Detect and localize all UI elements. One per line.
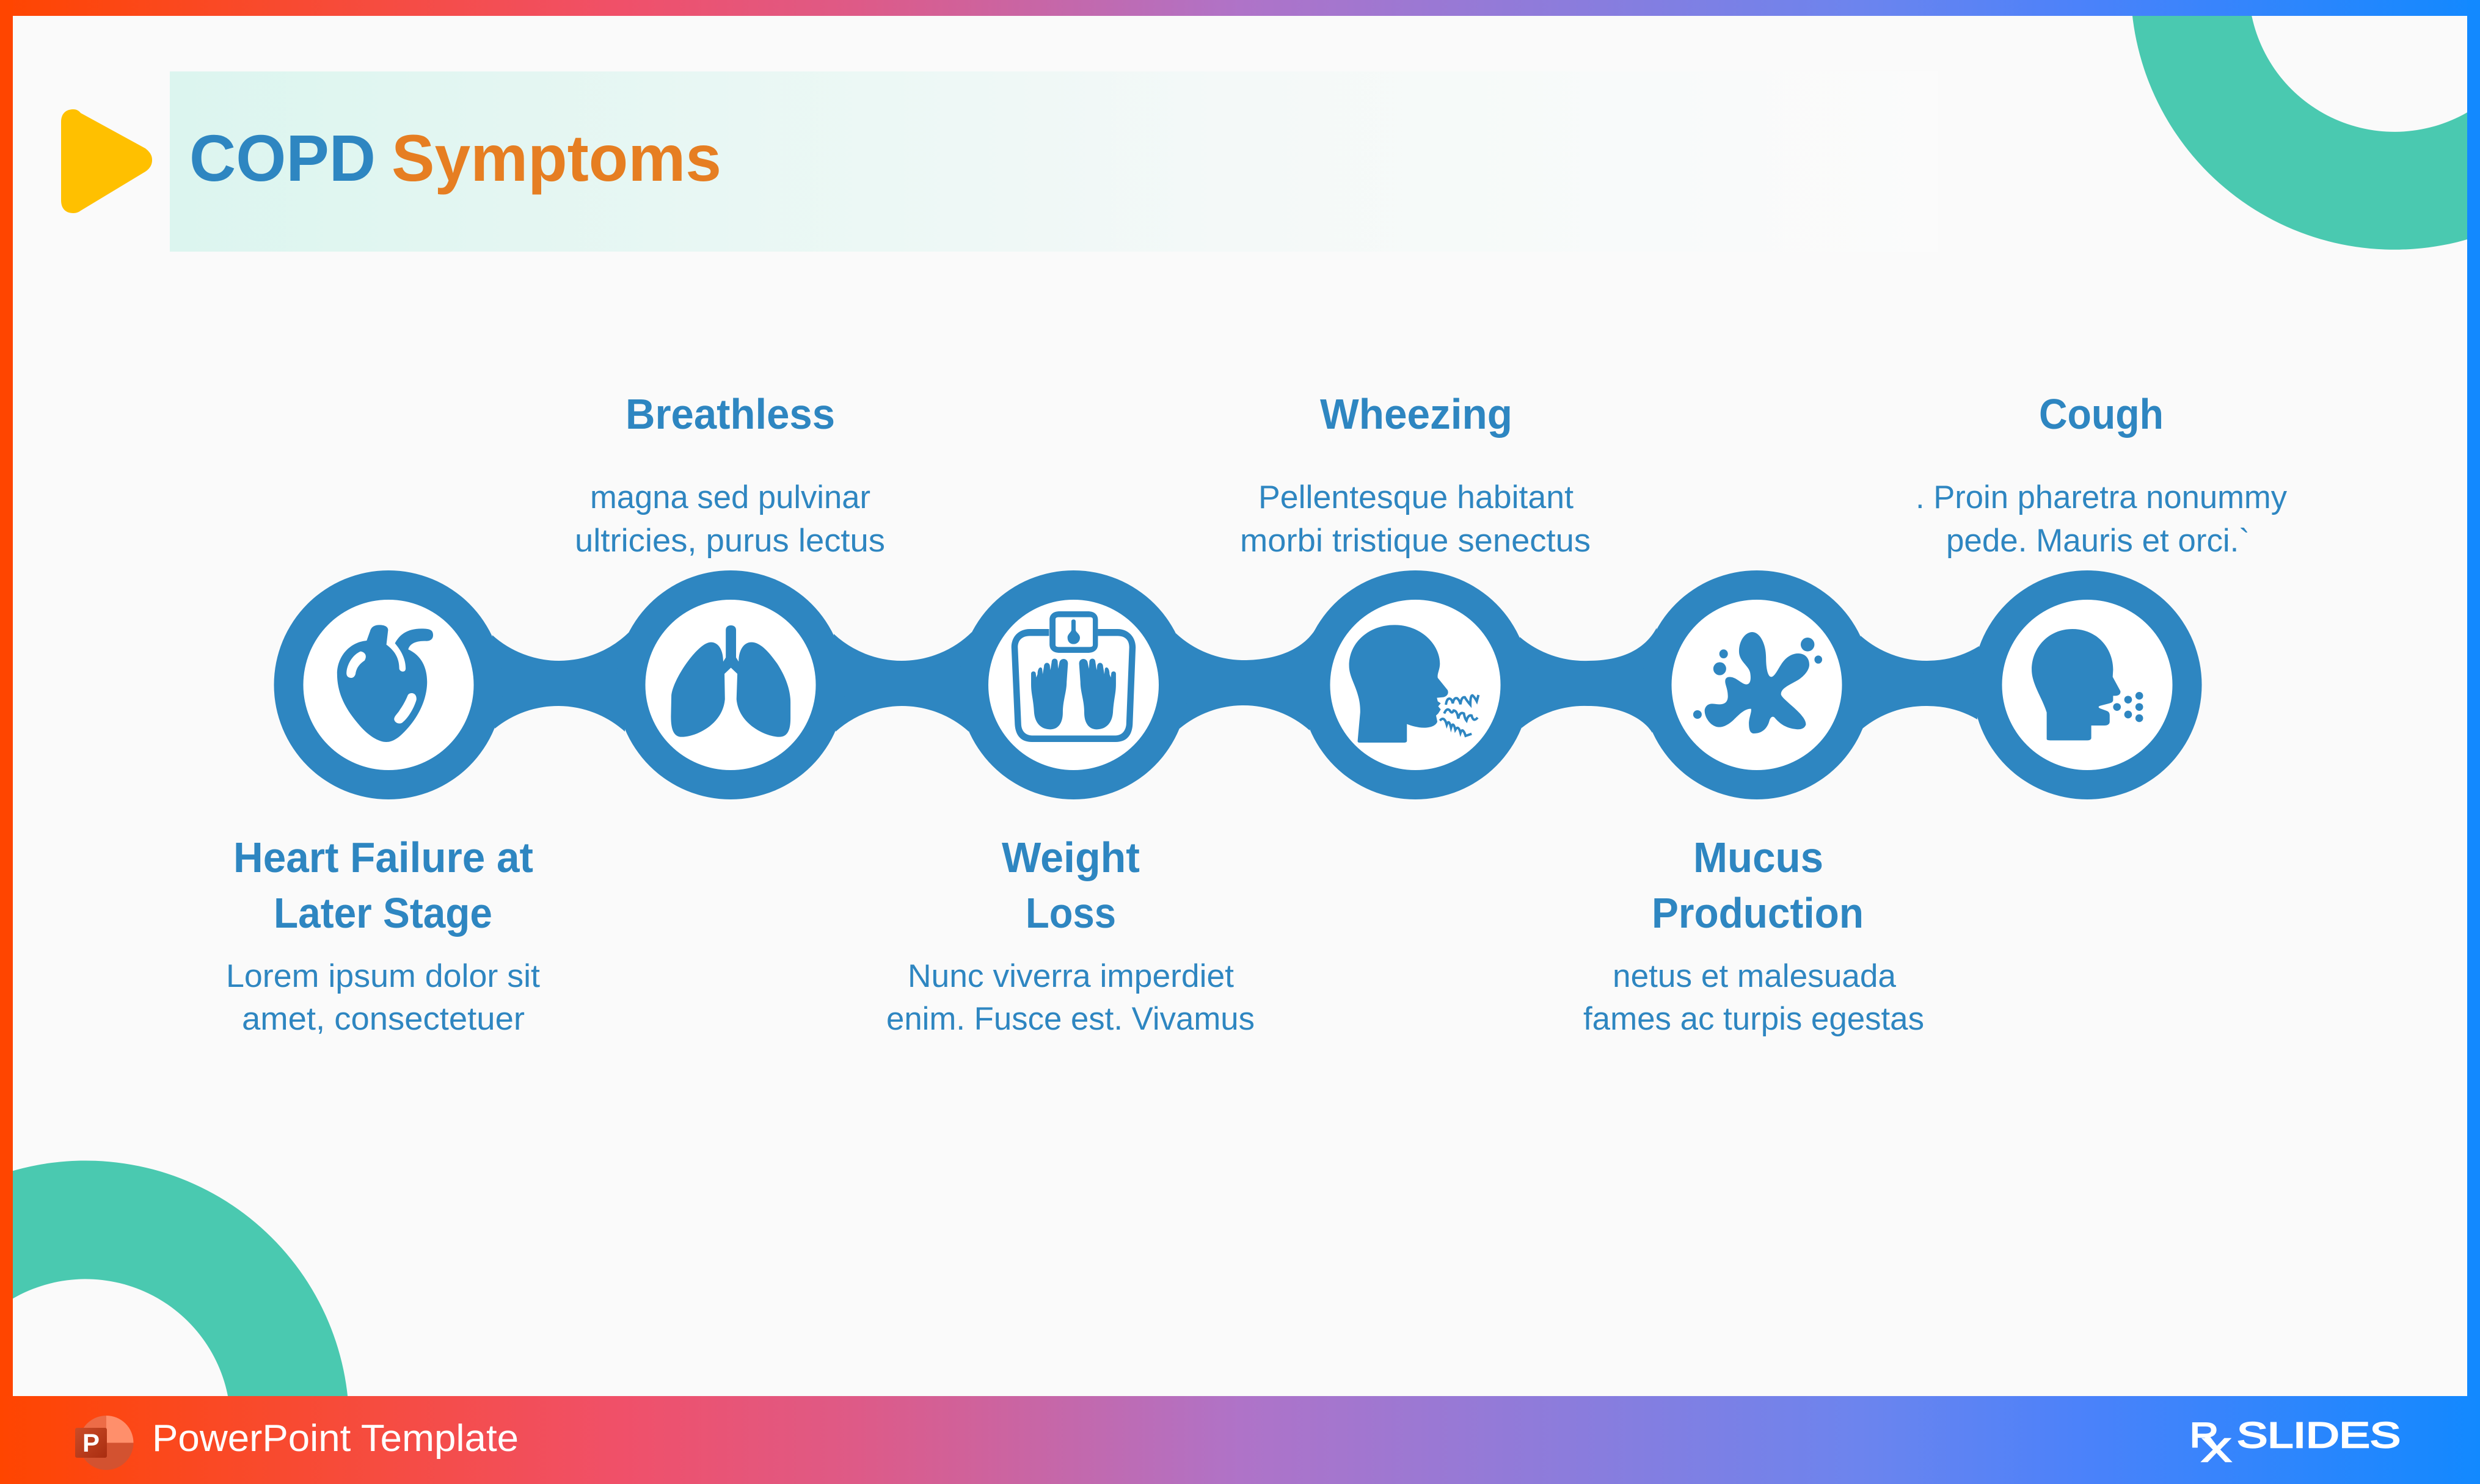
icon: PowerPoint logo (75, 1416, 133, 1470)
decorative ring: bottom left (9, 1160, 348, 1399)
icon: head coughing (2032, 629, 2143, 740)
label: Weight Loss: Nunc viverra imperdiet (908, 958, 1234, 994)
left border (0, 0, 13, 1484)
label: Heart Failure at Later Stage: amet, consectetuer (242, 1001, 525, 1037)
timeline chain of circles (274, 570, 2201, 799)
footer gradient bar (0, 1396, 2480, 1484)
icon: heart (337, 625, 433, 742)
label: Mucus Production: Production (1652, 889, 1864, 937)
label: Breathless: Breathless (625, 390, 835, 438)
label: Cough: pede. Mauris et orci.` (1946, 523, 2250, 559)
title: Symptoms (392, 121, 721, 195)
label: Cough: Cough (2039, 390, 2164, 438)
icon: mucus splat (1693, 632, 1822, 733)
title (189, 121, 721, 195)
title banner (170, 71, 1938, 252)
label: Heart Failure at Later Stage (226, 834, 540, 1037)
label: Mucus Production (1583, 834, 1924, 1037)
RX Slides logo: X (2201, 1432, 2231, 1469)
footer text: PowerPoint Template (152, 1417, 519, 1460)
label: Wheezing: Wheezing (1320, 390, 1512, 438)
icon: yellow play arrow (61, 109, 152, 213)
icon: PowerPoint logo: P (82, 1428, 100, 1457)
label: Heart Failure at Later Stage: Later Stage (274, 889, 492, 937)
label: Wheezing: morbi tristique senectus (1240, 523, 1591, 559)
label: Mucus Production: Mucus (1693, 834, 1823, 881)
label: Wheezing (1240, 390, 1591, 559)
top gradient bar (0, 0, 2480, 16)
label: Mucus Production: netus et malesuada (1613, 958, 1897, 994)
icon: head wheezing (1349, 625, 1478, 743)
label: Mucus Production: fames ac turpis egestas (1583, 1001, 1924, 1037)
icon: weighing scale with feet (1012, 611, 1136, 742)
label: Breathless (575, 390, 885, 559)
label: Weight Loss: enim. Fusce est. Vivamus (886, 1001, 1255, 1037)
label: Weight Loss: Weight (1002, 834, 1140, 881)
decorative ring: top right (2132, 12, 2471, 250)
label: Weight Loss: Loss (1026, 889, 1116, 937)
label: Breathless: ultricies, purus lectus (575, 523, 885, 559)
right border (2467, 0, 2480, 1484)
RX Slides logo: R (2190, 1416, 2219, 1455)
RX Slides logo (2190, 1416, 2401, 1469)
label: Heart Failure at Later Stage: Heart Failure at (233, 834, 533, 881)
label: Wheezing: Pellentesque habitant (1258, 479, 1574, 515)
icon: lungs (671, 625, 790, 737)
RX Slides logo: SLIDES (2237, 1416, 2401, 1455)
label: Breathless: magna sed pulvinar (590, 479, 870, 515)
label: Cough: . Proin pharetra nonummy (1916, 479, 2287, 515)
label: Heart Failure at Later Stage: Lorem ipsum dolor sit (226, 958, 540, 994)
title: COPD (189, 121, 376, 195)
label: Weight Loss (886, 834, 1255, 1037)
label: Cough (1916, 390, 2287, 559)
